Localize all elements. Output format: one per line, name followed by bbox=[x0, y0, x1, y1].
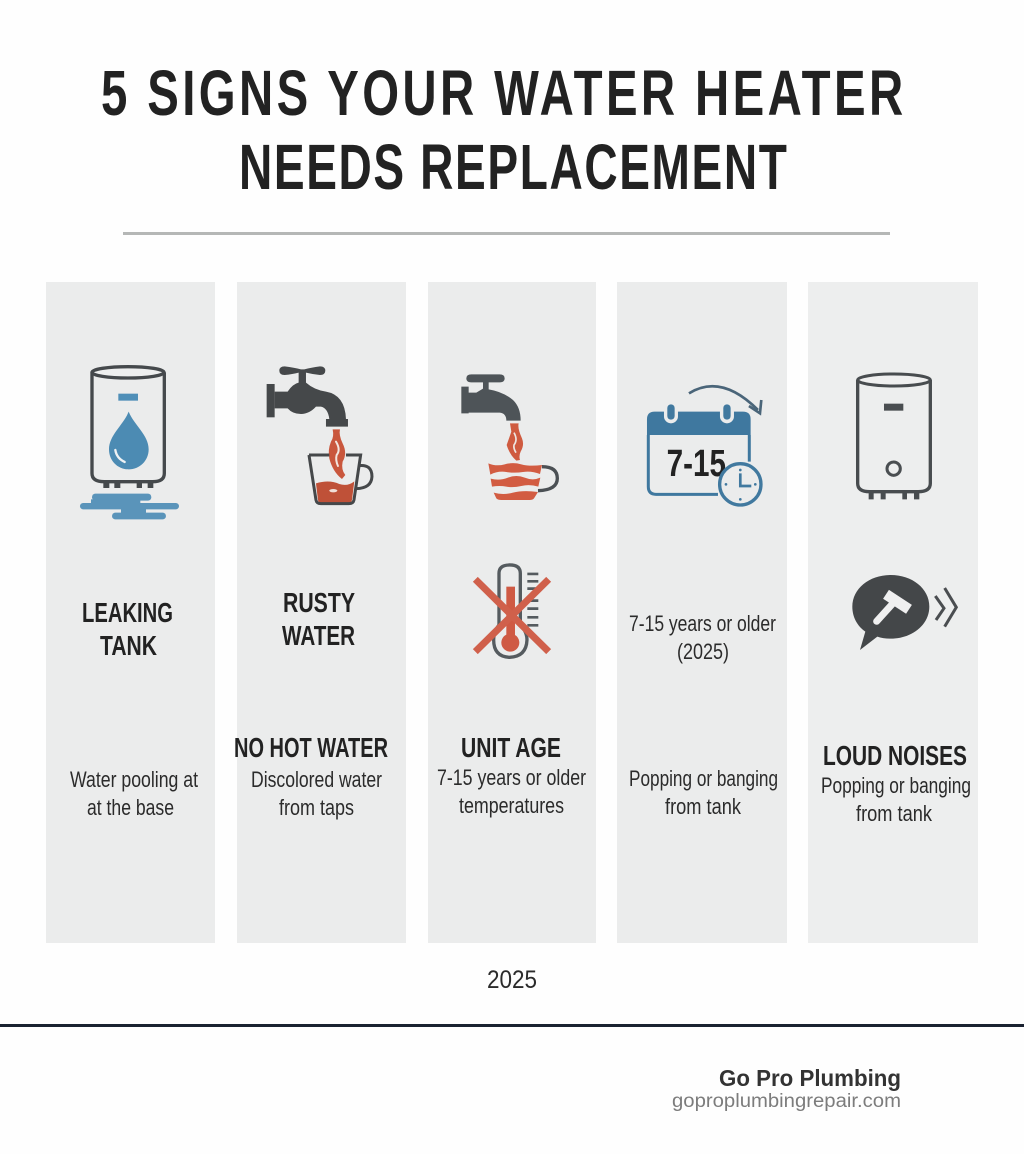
icon: faucet and wavy cup bbox=[461, 374, 557, 657]
text: unit age description: Popping or banging bbox=[629, 766, 778, 791]
panel: no hot water bbox=[428, 282, 596, 943]
panel: leaking tank bbox=[46, 282, 215, 943]
icon: calendar with clock: 7-15 bbox=[667, 442, 726, 485]
text: rusty water description: Discolored water bbox=[251, 767, 382, 792]
heading: leaking tank bbox=[82, 597, 173, 661]
text: leaking tank description: Water pooling at bbox=[70, 767, 198, 792]
text: rusty water description: from taps bbox=[279, 795, 354, 820]
heading: rusty water: WATER bbox=[282, 620, 355, 651]
text: no hot water description bbox=[437, 765, 586, 818]
text: age note: (2025) bbox=[677, 639, 729, 664]
footer brand: goproplumbingrepair.com bbox=[672, 1091, 901, 1112]
panel: loud noises bbox=[808, 282, 978, 943]
icon: rusty faucet and cup bbox=[267, 366, 372, 504]
text: loud noises description bbox=[821, 773, 971, 826]
text: no hot water description: temperatures bbox=[459, 793, 564, 818]
title: 5 SIGNS YOUR WATER HEATER bbox=[101, 57, 903, 129]
heading: leaking tank: TANK bbox=[100, 630, 157, 661]
heading: leaking tank: LEAKING bbox=[82, 597, 173, 628]
footer brand: Go Pro Plumbing bbox=[719, 1065, 901, 1091]
icon: hammer speech bubble bbox=[852, 575, 956, 650]
text: loud noises description: Popping or banging bbox=[821, 773, 971, 798]
text: age note bbox=[629, 611, 776, 664]
icon: leaking water heater bbox=[80, 367, 179, 519]
text: unit age description: from tank bbox=[665, 794, 742, 819]
heading: loud noises: LOUD NOISES bbox=[823, 740, 967, 771]
icon: water heater bbox=[858, 374, 930, 499]
footer brand bbox=[672, 1065, 901, 1112]
year label: 2025 bbox=[487, 966, 537, 994]
icon: calendar with clock bbox=[647, 386, 761, 505]
text: loud noises description: from tank bbox=[856, 801, 933, 826]
text: unit age description bbox=[629, 766, 778, 819]
text: no hot water description: 7-15 years or older bbox=[437, 765, 586, 790]
title: NEEDS REPLACEMENT bbox=[239, 132, 787, 203]
heading: no hot water: NO HOT WATER bbox=[234, 732, 388, 763]
panel: unit age bbox=[617, 282, 787, 943]
text: age note: 7-15 years or older bbox=[629, 611, 776, 636]
icon: thermometer crossed out bbox=[475, 565, 549, 657]
text: rusty water description bbox=[251, 767, 382, 820]
text: leaking tank description: at the base bbox=[87, 795, 174, 820]
heading: rusty water: RUSTY bbox=[283, 587, 355, 618]
heading: rusty water bbox=[282, 587, 355, 651]
heading: unit age: UNIT AGE bbox=[461, 732, 561, 763]
title bbox=[101, 57, 903, 203]
text: leaking tank description bbox=[70, 767, 198, 820]
panel: rusty water bbox=[234, 282, 406, 943]
